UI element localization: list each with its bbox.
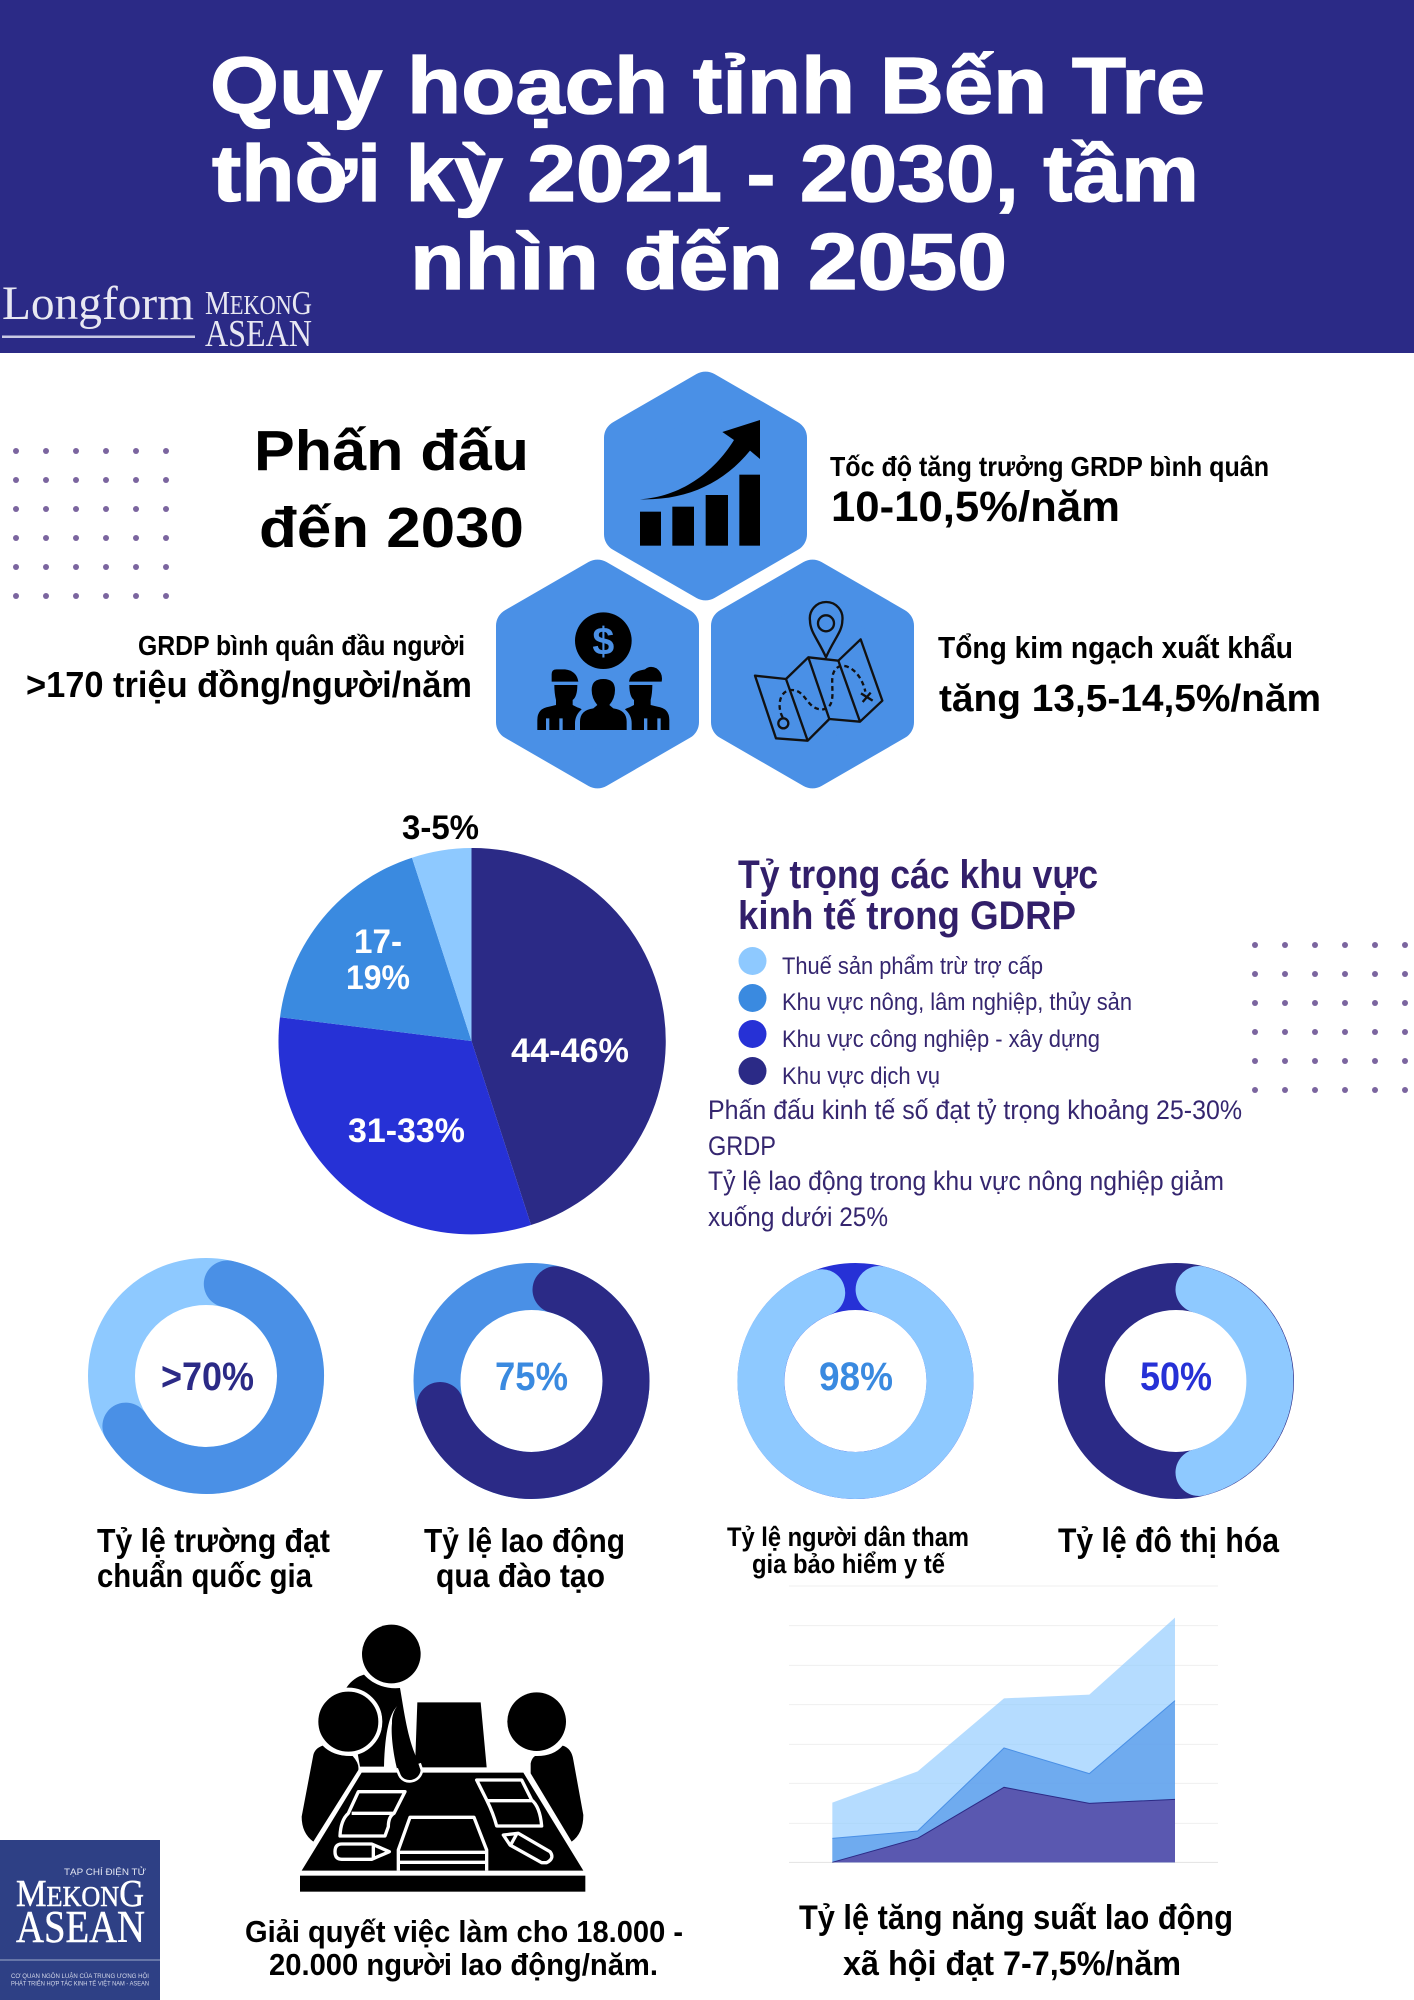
logo: Longform Mekong ASEAN: MEKONG (205, 285, 312, 322)
title: nhìn đến 2050 (410, 217, 1007, 306)
hexagon: people income icon (514, 578, 681, 770)
logo: Longform Mekong ASEAN: ASEAN (205, 313, 312, 355)
donut: trained labour 75% (437, 1286, 626, 1476)
donut: urbanisation 50% (1082, 1286, 1270, 1476)
legend: Khu vực công nghiệp - xây dựng (782, 1026, 1100, 1053)
stat: GRDP per capita: GRDP bình quân đầu người (138, 630, 465, 661)
label: health insurance: gia bảo hiểm y tế (752, 1549, 946, 1579)
donut: trained labour 75%: 75% (495, 1355, 568, 1399)
text block: digital economy and labour targets: xuống dưới 25% (708, 1202, 888, 1232)
legend: Khu vực nông, lâm nghiệp, thủy sản (782, 989, 1132, 1016)
text block: digital economy and labour targets: Phấn đấu kinh tế số đạt tỷ trọng khoảng 25-30% (708, 1095, 1242, 1125)
text block: digital economy and labour targets: Tỷ lệ lao động trong khu vực nông nghiệp giảm (708, 1166, 1224, 1196)
title: Quy hoạch tỉnh Bến Tre (210, 41, 1205, 130)
donut: school standard >70%: >70% (161, 1355, 254, 1399)
text block: digital economy and labour targets (708, 1095, 1242, 1232)
label: school standard (97, 1522, 330, 1594)
heading: GRDP sector share (738, 853, 1098, 938)
icon: bars and rising arrow (640, 420, 760, 546)
title: thời kỳ 2021 - 2030, tầm (212, 129, 1199, 218)
label: health insurance (727, 1522, 969, 1579)
icon: three people with dollar coin: $ (592, 619, 614, 663)
header banner (0, 0, 1414, 355)
stat: growth rate (830, 451, 1269, 531)
donut: health insurance 98%: 98% (819, 1355, 893, 1399)
pie chart (278, 809, 666, 1234)
stat: export turnover: tăng 13,5-14,5%/năm (939, 678, 1321, 720)
logo: Longform Mekong ASEAN (2, 277, 312, 355)
stat: growth rate: 10-10,5%/năm (831, 483, 1120, 531)
logo: Longform Mekong ASEAN: Longform (2, 277, 194, 330)
decorative dots right (1252, 942, 1408, 1093)
label: trained labour: Tỷ lệ lao động (424, 1522, 625, 1559)
icon: people working at table (300, 1625, 585, 1892)
label: job creation (245, 1914, 683, 1982)
stat: GRDP per capita (26, 630, 472, 705)
heading: Phấn đấu đến 2030 (254, 419, 529, 560)
hexagon: growth chart icon (622, 390, 789, 582)
label: job creation: 20.000 người lao động/năm. (269, 1947, 658, 1982)
legend: Khu vực dịch vụ (782, 1063, 940, 1090)
label: school standard: chuẩn quốc gia (97, 1557, 313, 1594)
logo: Mekong ASEAN magazine: CƠ QUAN NGÔN LUẬN CỦA TRUNG ƯƠNG HỘI (11, 1971, 149, 1980)
label: school standard: Tỷ lệ trường đạt (97, 1522, 330, 1559)
pie labels: 19% (346, 959, 410, 997)
logo: Mekong ASEAN magazine: MEKONG (16, 1873, 144, 1915)
stat: export turnover: Tổng kim ngạch xuất khẩu (938, 630, 1293, 665)
donut: urbanisation 50%: 50% (1140, 1355, 1212, 1399)
text block: digital economy and labour targets: GRDP (708, 1131, 776, 1161)
logo: Mekong ASEAN magazine: TẠP CHÍ ĐIỆN TỬ (64, 1866, 146, 1877)
logo: Mekong ASEAN magazine (0, 1840, 160, 2000)
label: health insurance: Tỷ lệ người dân tham (727, 1522, 969, 1552)
icon: folded map with pin (755, 602, 882, 741)
stat: GRDP per capita: >170 triệu đồng/người/năm (26, 664, 472, 705)
icon: three people with dollar coin (537, 612, 669, 730)
heading: GRDP sector share: Tỷ trọng các khu vực (738, 853, 1098, 897)
label: urbanisation: Tỷ lệ đô thị hóa (1058, 1522, 1280, 1560)
heading: Phấn đấu đến 2030: Phấn đấu (254, 419, 529, 483)
label: job creation: Giải quyết việc làm cho 18.000 - (245, 1914, 683, 1949)
hexagon: map icon (729, 578, 896, 770)
pie labels (346, 809, 629, 1150)
label: labour productivity (799, 1899, 1233, 1983)
heading: GRDP sector share: kinh tế trong GDRP (738, 894, 1076, 938)
donut: health insurance 98% (761, 1286, 950, 1476)
pie labels: 3-5% (402, 809, 479, 847)
heading: Phấn đấu đến 2030: đến 2030 (259, 496, 524, 560)
legend (738, 947, 1132, 1090)
donut: school standard >70% (112, 1282, 301, 1470)
label: labour productivity: Tỷ lệ tăng năng suất lao động (799, 1899, 1233, 1937)
logo: Mekong ASEAN magazine: PHÁT TRIỂN HỢP TÁC KINH TẾ VIỆT NAM - ASEAN (11, 1978, 149, 1988)
label: trained labour: qua đào tạo (436, 1557, 605, 1594)
logo: Mekong ASEAN magazine: ASEAN (16, 1902, 145, 1952)
label: trained labour (424, 1522, 625, 1594)
pie labels: 44-46% (511, 1032, 629, 1070)
stat: growth rate: Tốc độ tăng trưởng GRDP bình quân (830, 451, 1269, 482)
legend: Thuế sản phẩm trừ trợ cấp (782, 953, 1043, 980)
title (210, 41, 1205, 306)
label: labour productivity: xã hội đạt 7-7,5%/năm (843, 1945, 1181, 1983)
stat: export turnover (938, 630, 1321, 720)
area chart: labour productivity (789, 1586, 1218, 1862)
decorative dots left (13, 448, 169, 599)
pie labels: 31-33% (348, 1112, 465, 1150)
pie labels: 17- (354, 923, 402, 961)
